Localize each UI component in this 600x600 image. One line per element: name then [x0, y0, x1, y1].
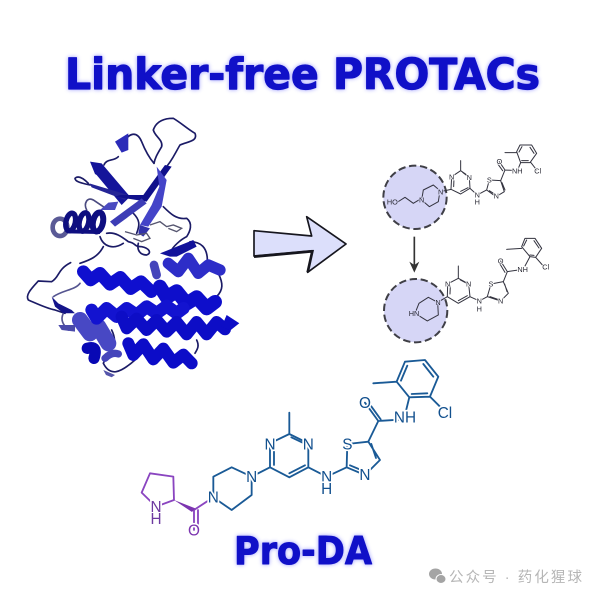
beta sheets: [89, 133, 197, 257]
molecule: upper structure: N: [438, 187, 443, 196]
title: Linker-free PROTACs: Linker-free PROTACs: [65, 50, 540, 100]
icon: watermark chat bubbles: [429, 568, 446, 584]
proline warhead: H: [150, 511, 162, 528]
molecule: lower structure: N: [498, 296, 503, 305]
protein loops: [27, 118, 222, 372]
proline warhead: N: [150, 499, 162, 516]
dark helix: [53, 211, 105, 236]
dasatinib core: [208, 360, 452, 510]
dasatinib core: N: [246, 469, 257, 486]
molecule: Pro-DA structure: [142, 360, 452, 540]
molecule: lower structure: O: [498, 257, 504, 266]
label: Pro-DA: Pro-DA: [234, 529, 373, 573]
dasatinib core: S: [342, 436, 352, 453]
ligand: [125, 222, 182, 242]
molecule: upper structure: S: [487, 176, 492, 185]
molecule: upper structure: O: [496, 157, 502, 166]
molecule: lower structure: NH: [517, 265, 528, 274]
molecule: upper structure: N: [419, 196, 424, 205]
dasatinib core: NH: [394, 410, 416, 427]
arrow: main transformation arrow: [254, 217, 346, 272]
dasatinib core: Cl: [438, 405, 452, 422]
proline warhead: [142, 473, 213, 540]
dasatinib core: N: [321, 469, 332, 486]
arrow: down reaction: [409, 237, 419, 273]
molecule: upper structure: Cl: [534, 166, 541, 175]
dasatinib core: O: [359, 395, 371, 412]
molecule group: top right dasatinib analogues: [383, 145, 549, 342]
molecule: upper structure: HO: [387, 198, 398, 207]
molecule: lower structure: N: [435, 298, 441, 307]
dasatinib core: H: [321, 481, 332, 498]
dasatinib core: N: [359, 467, 371, 484]
molecule: lower structure: HN: [409, 309, 419, 318]
molecule: lower structure: N: [445, 280, 450, 289]
circle highlight: hydroxyethyl piperazine: [383, 166, 447, 229]
watermark text: 公众号 · 药化猩球: [449, 569, 582, 586]
dasatinib core: N: [303, 436, 314, 453]
molecule: lower structure: N: [466, 280, 471, 289]
molecule: upper structure: [387, 145, 541, 207]
molecule: upper structure: N: [467, 173, 472, 182]
molecule: lower structure: S: [489, 280, 494, 289]
proline warhead: O: [188, 523, 200, 540]
molecule: upper structure: N: [475, 190, 480, 199]
molecule: lower structure: H: [477, 304, 482, 313]
protein ribbon structure: [27, 118, 239, 377]
dasatinib core: N: [208, 490, 219, 507]
circle highlight: piperazine: [384, 279, 447, 342]
molecule: upper structure: NH: [512, 166, 523, 175]
molecule: lower structure: [409, 238, 549, 321]
molecule: upper structure: N: [449, 172, 454, 181]
molecule: lower structure: Cl: [542, 262, 549, 271]
molecule: upper structure: H: [475, 197, 480, 206]
dasatinib core: N: [264, 436, 276, 453]
molecule: upper structure: N: [494, 192, 499, 201]
blue helices: [52, 258, 239, 377]
molecule: lower structure: N: [477, 297, 482, 306]
